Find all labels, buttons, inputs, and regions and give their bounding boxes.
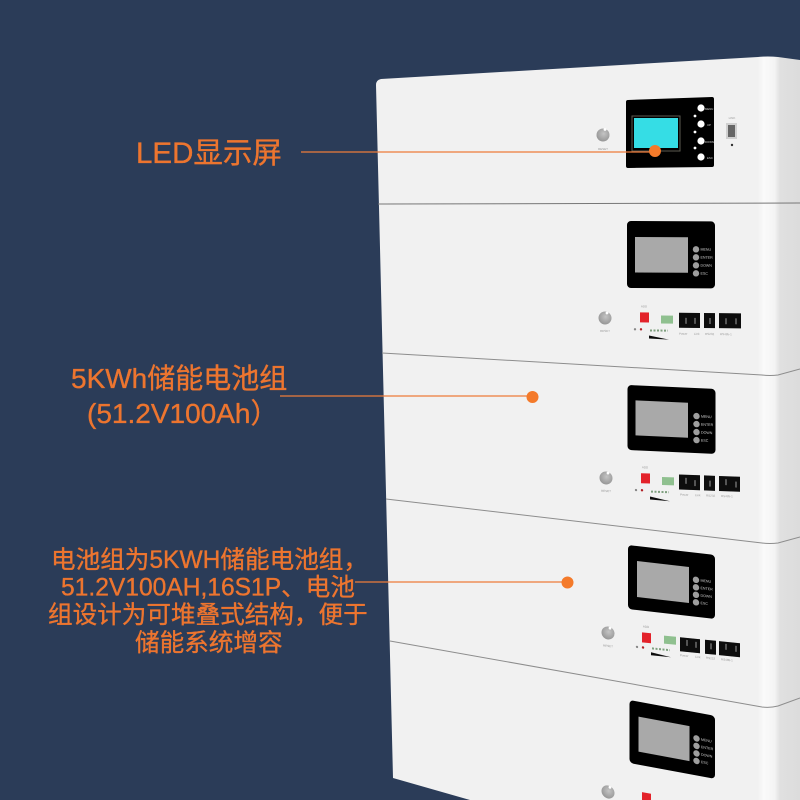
text block: stackable description: [48, 546, 368, 657]
LED panel buttons: [694, 104, 714, 161]
text block: stackable description: 储能系统增容: [135, 629, 283, 657]
stack seams: [378, 203, 800, 707]
control row 3: RS232: [706, 494, 716, 498]
text block: battery pack label: [71, 363, 287, 429]
battery module 4 controls: [602, 545, 740, 664]
display panel 2: DOWN: [700, 264, 712, 268]
control row 2: RS485-1: [720, 332, 732, 336]
control row 2: ADD: [641, 304, 648, 308]
callout line: stackable design: [355, 576, 574, 588]
text block: battery pack label: 5KWh储能电池组: [71, 363, 287, 394]
LED panel buttons: DOWN: [705, 140, 714, 144]
control row 3: RS485-1: [721, 494, 733, 498]
control row 2: RS232: [705, 332, 715, 336]
control row 5: [602, 784, 740, 800]
display panel 3: ENTER: [701, 423, 714, 427]
display panel 2: ENTER: [700, 256, 713, 260]
heading: LED display label: LED显示屏: [136, 137, 282, 170]
top LED panel: [626, 97, 714, 168]
control row 3: Power: [680, 493, 689, 497]
control row 4: RS232: [706, 656, 715, 661]
LED panel buttons: ESC: [707, 156, 713, 160]
display panel 2: MENU: [700, 248, 711, 252]
display panel 5: [630, 700, 715, 779]
top control module: [596, 97, 737, 168]
control row 3: Link: [695, 493, 701, 497]
control row 3: RESET: [601, 489, 611, 493]
control row 2: Power: [679, 332, 688, 336]
control row 4: Link: [695, 655, 701, 659]
battery stack: [376, 56, 800, 800]
link port: LINK: [729, 116, 735, 120]
top knob: [596, 128, 610, 151]
control row 3: [600, 464, 740, 504]
display panel 2: [627, 221, 715, 288]
display panel 4: ENTER: [700, 586, 713, 592]
control row 2: RESET: [600, 329, 610, 333]
display panel 4: DOWN: [700, 594, 712, 599]
display panel 3: DOWN: [701, 431, 713, 435]
display panel 3: ESC: [701, 439, 709, 443]
text block: stackable description: 组设计为可堆叠式结构，便于: [48, 601, 368, 629]
display panel 4: MENU: [700, 579, 711, 584]
text block: stackable description: 51.2V100AH,16S1P、电池: [61, 574, 355, 602]
battery module 3 controls: [600, 385, 740, 504]
text block: stackable description: 电池组为5KWH储能电池组，: [51, 546, 368, 574]
callout line: battery pack: [280, 391, 538, 403]
battery module 5 controls: [602, 700, 740, 800]
display panel 2: ESC: [700, 272, 708, 276]
control row 2: [598, 304, 741, 340]
top knob: RESET: [598, 147, 608, 151]
display panel 5: ESC: [701, 760, 709, 766]
battery module 2 controls: [598, 221, 741, 340]
display panel 5: DOWN: [701, 753, 713, 759]
display panel 4: ESC: [700, 601, 708, 606]
LED panel buttons: MENU: [705, 107, 713, 111]
display panel 3: [628, 385, 716, 454]
LED panel buttons: UP: [707, 123, 711, 127]
control row 4: ADD: [643, 624, 650, 629]
LED screen: [632, 116, 680, 151]
control row 4: RS485-1: [721, 657, 733, 663]
link port: [726, 116, 737, 146]
display panel 5: ENTER: [701, 745, 714, 751]
text block: battery pack label: (51.2V100Ah）: [87, 398, 278, 429]
control row 4: Power: [680, 653, 688, 658]
control row 4: RESET: [603, 644, 613, 649]
control row 3: ADD: [642, 465, 649, 470]
callout line: LED display: [301, 145, 661, 157]
display panel 4: [628, 545, 715, 619]
display panel 3: MENU: [701, 415, 712, 419]
control row 2: Link: [694, 332, 700, 336]
control row 4: [602, 620, 740, 664]
display panel 5: MENU: [701, 738, 712, 744]
cabinet body: [376, 56, 800, 800]
